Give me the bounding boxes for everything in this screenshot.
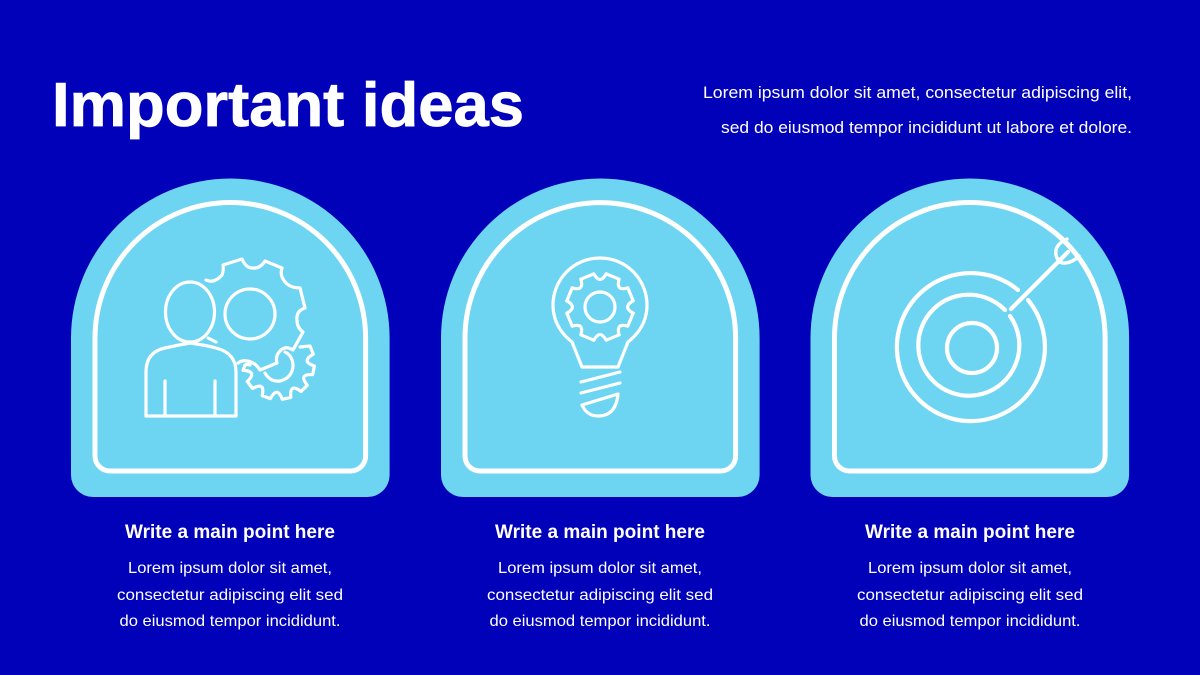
description: Lorem ipsum dolor sit amet, [868, 560, 1072, 577]
description: do eiusmod tempor incididunt. [490, 613, 710, 630]
description [487, 560, 713, 630]
panel: people and gears [71, 178, 390, 630]
description: do eiusmod tempor incididunt. [120, 613, 340, 630]
heading: Write a main point here [495, 522, 705, 543]
description [857, 560, 1083, 630]
description: consectetur adipiscing elit sed [117, 587, 343, 604]
heading: Write a main point here [125, 522, 335, 543]
description: Lorem ipsum dolor sit amet, [498, 560, 702, 577]
title: Important ideas [52, 71, 524, 140]
description: consectetur adipiscing elit sed [857, 587, 1083, 604]
description: consectetur adipiscing elit sed [487, 587, 713, 604]
description [117, 560, 343, 630]
description: do eiusmod tempor incididunt. [860, 613, 1080, 630]
icon: target with arrow [897, 239, 1079, 421]
intro text: Lorem ipsum dolor sit amet, consectetur adipiscing elit, [703, 84, 1132, 102]
description: Lorem ipsum dolor sit amet, [128, 560, 332, 577]
panel: target [810, 178, 1129, 630]
intro text [703, 84, 1132, 137]
icon: person with gears [146, 259, 314, 416]
heading: Write a main point here [865, 522, 1075, 543]
intro text: sed do eiusmod tempor incididunt ut labore et dolore. [721, 119, 1132, 137]
icon: light bulb with gear [553, 258, 647, 416]
panel: light bulb [441, 178, 760, 630]
